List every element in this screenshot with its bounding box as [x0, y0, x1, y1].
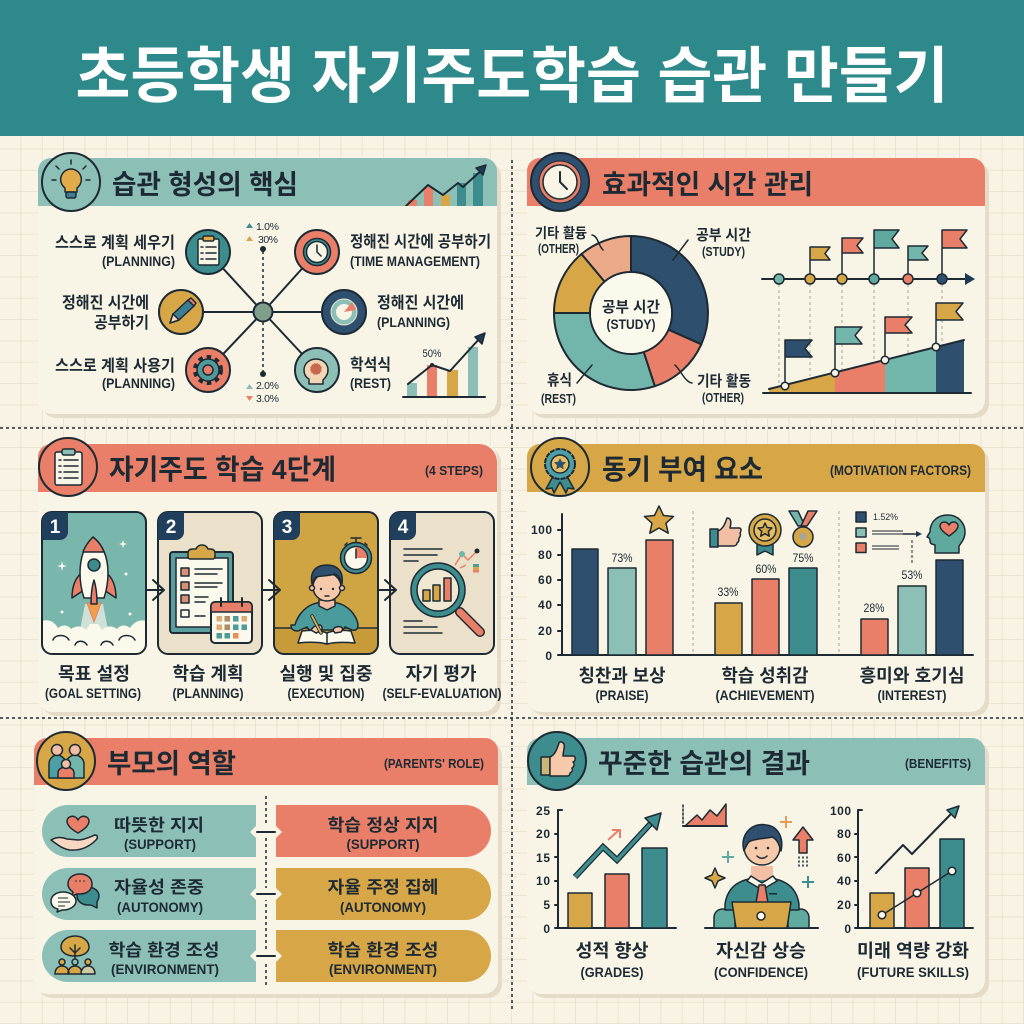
donut label: other bottom: (OTHER): [702, 391, 744, 405]
step 3 label: [280, 664, 372, 701]
bars: achievement: [715, 551, 817, 655]
label: interest: 흥미와 호기심: [860, 666, 964, 686]
row 2 left: autonomy: 자율성 존중: [114, 878, 204, 897]
chart: future skills: 100: [830, 804, 851, 818]
step 1 label: 목표 설정: [58, 664, 130, 684]
label: praise: (PRAISE): [596, 687, 648, 703]
icon: pencil node: [159, 290, 203, 334]
chart: grades: 0: [543, 922, 550, 936]
label: study: 정해진 시간에: [62, 294, 149, 312]
chart: grades: 5: [543, 898, 550, 912]
donut label: study: [696, 227, 751, 259]
label: planning 3: [55, 357, 175, 391]
donut label: other bottom: [697, 373, 751, 405]
icon: clock node: [295, 230, 339, 274]
chart: future skills: 0: [844, 922, 851, 936]
step 3 label: 실행 및 집중: [280, 664, 372, 684]
chart: future skills: 80: [837, 827, 851, 841]
bottom values: 2.0%: [256, 380, 279, 392]
chart: grades: 20: [536, 827, 550, 841]
icon: badge: [749, 514, 781, 555]
small growth chart: [403, 333, 485, 397]
chart: future skills: 60: [837, 851, 851, 865]
label: praise: 칭찬과 보상: [578, 666, 666, 686]
label: planning: 스스로 계획 세우기: [55, 234, 175, 252]
row 1 right: support: [276, 805, 491, 857]
step 4 label: 자기 평가: [406, 664, 477, 684]
label: rest: 학석식: [350, 356, 391, 374]
step 1 card: rocket: [42, 512, 146, 654]
bars: praise: [572, 506, 674, 655]
label: time management: [350, 233, 491, 269]
y axis: 80: [538, 548, 552, 562]
donut label: other top: [535, 225, 587, 256]
heading: 꾸준한 습관의 결과: [598, 749, 810, 779]
y axis: 0: [545, 649, 552, 663]
chart: future skills: [830, 804, 973, 936]
label: future skills: [857, 941, 969, 980]
flag timeline: [762, 230, 975, 386]
label: confidence: [714, 941, 808, 980]
bars: interest: 53%: [902, 568, 923, 582]
donut center label: 공부 시간: [602, 299, 660, 316]
panel: 꾸준한 습관의 결과: [527, 732, 989, 998]
label: achievement: 학습 성취감: [722, 666, 809, 686]
heading: 효과적인 시간 관리: [602, 170, 813, 200]
icon: family: [37, 732, 95, 790]
label: time management: 정해진 시간에 공부하기: [350, 233, 491, 251]
row 3 right: environment: [276, 930, 491, 982]
row 2 right: autonomy: 자율 주정 집헤: [328, 878, 438, 897]
illustration: confident student: [705, 816, 818, 928]
label: study: [62, 294, 149, 332]
label: rest: (REST): [350, 375, 391, 391]
row 1 right: support: 학습 정상 지지: [328, 816, 438, 835]
title banner: [0, 0, 1024, 136]
chart: grades: 10: [536, 874, 550, 888]
donut label: rest: 휴식: [547, 372, 572, 389]
row 1 left: support: (SUPPORT): [124, 836, 196, 852]
icon: timer node: [322, 290, 366, 334]
top values: 30%: [258, 234, 278, 246]
label: planning: [55, 234, 175, 269]
y axis: 40: [538, 598, 552, 612]
y axis: 20: [538, 624, 552, 638]
panel: 효과적인 시간 관리: [527, 153, 989, 418]
panel: 동기 부여 요소: [527, 438, 989, 716]
step 3 card: student and stopwatch: [274, 512, 378, 654]
y axis: [531, 514, 973, 663]
donut label: other bottom: 기타 활동: [697, 373, 751, 390]
step 2 card: clipboard and calendar: 2: [166, 517, 176, 538]
row 1 left: support: [42, 805, 256, 857]
step 2 label: [172, 664, 244, 701]
mini legend: 1.52%: [873, 512, 899, 523]
donut label: other top: (OTHER): [538, 242, 579, 256]
step 1 card: rocket: 1: [50, 517, 61, 538]
bars: interest: [861, 560, 963, 655]
icon: medal: [789, 511, 817, 547]
milestone area chart: [763, 303, 971, 393]
row 3 right: environment: 학습 환경 조성: [328, 941, 438, 960]
donut label: other top: 기타 활듕: [535, 225, 587, 241]
chart: future skills: 20: [837, 898, 851, 912]
label: planning 2: [377, 294, 464, 330]
step 3 card: student and stopwatch: 3: [282, 517, 292, 538]
label: interest: [860, 666, 964, 703]
row 2 right: autonomy: [276, 868, 491, 920]
top values: [246, 221, 279, 246]
english tag: (PARENTS' ROLE): [384, 756, 484, 771]
center connector: [250, 796, 282, 987]
header chart: [406, 165, 486, 206]
panel: 자기주도 학습 4단계: [38, 438, 502, 716]
row 3 right: environment: (ENVIRONMENT): [329, 961, 437, 977]
chart: future skills: 40: [837, 874, 851, 888]
step 1 label: (GOAL SETTING): [45, 685, 141, 701]
label: future skills: 미래 역량 강화: [857, 941, 969, 961]
bottom values: [246, 380, 279, 405]
icon: head node: [295, 348, 339, 392]
donut center label: [602, 299, 660, 332]
step 4 card: magnifier: [390, 512, 494, 654]
english tag: (MOTIVATION FACTORS): [830, 463, 971, 478]
step 4 card: magnifier: 4: [398, 517, 409, 538]
arrow: step 3 to 4: [379, 580, 396, 600]
icon: light bulb: [42, 153, 100, 211]
donut label: study: (STUDY): [702, 245, 745, 259]
mini legend: [856, 512, 922, 563]
mini area chart: [683, 804, 727, 826]
y axis: 60: [538, 573, 552, 587]
step 2 card: clipboard and calendar: [158, 512, 262, 654]
bars: achievement: 60%: [756, 562, 777, 576]
donut label: rest: [541, 372, 576, 406]
heading: 습관 형성의 핵심: [112, 170, 298, 200]
label: grades: [576, 941, 649, 980]
donut label: study: 공부 시간: [696, 227, 751, 244]
label: confidence: 자신감 상승: [716, 941, 806, 961]
chart: grades: [536, 804, 676, 936]
step 1 label: [45, 664, 141, 701]
heading: 자기주도 학습 4단계: [109, 454, 336, 485]
icon: rosette: [531, 438, 589, 496]
top values: 1.0%: [256, 221, 279, 233]
row 2 right: autonomy: (AUTONOMY): [340, 899, 426, 915]
row 1 right: support: (SUPPORT): [346, 836, 420, 852]
chart: grades: 15: [536, 851, 550, 865]
row 3 left: environment: (ENVIRONMENT): [111, 961, 219, 977]
bottom values: 3.0%: [256, 393, 279, 405]
icon: thumbs up: [528, 732, 586, 790]
label: rest: [350, 356, 391, 391]
bars: achievement: 33%: [718, 585, 739, 599]
step 4 label: [382, 664, 502, 701]
arrow: step 1 to 2: [147, 580, 164, 600]
step 4 label: (SELF-EVALUATION): [382, 685, 502, 701]
label: achievement: (ACHIEVEMENT): [716, 687, 814, 703]
y axis: 100: [531, 523, 552, 537]
label: grades: 성적 향상: [576, 941, 649, 961]
bars: interest: 28%: [864, 601, 885, 615]
label: praise: [578, 666, 666, 703]
icon: head with heart: [927, 515, 965, 553]
chart: grades: 25: [536, 804, 550, 818]
small growth chart: 50%: [422, 348, 442, 360]
label: study: 공부하기: [94, 314, 149, 332]
heading: 부모의 역할: [107, 749, 236, 779]
label: planning 2: (PLANNING): [377, 314, 450, 330]
step 2 label: 학습 계획: [172, 664, 244, 684]
panel: 습관 형성의 핵심: [38, 153, 501, 418]
arrow: step 2 to 3: [263, 580, 280, 600]
heading: 동기 부여 요소: [602, 454, 763, 485]
donut center label: (STUDY): [606, 317, 656, 332]
step 3 label: (EXECUTION): [288, 685, 364, 701]
label: planning: (PLANNING): [102, 253, 175, 269]
icon: thumbs up: [710, 518, 741, 547]
panel: 부모의 역할: [34, 732, 502, 998]
row 3 left: environment: 학습 환경 조성: [108, 941, 220, 960]
label: achievement: [716, 666, 814, 703]
label: planning 3: 스스로 계획 사용기: [55, 357, 175, 375]
row 2 left: autonomy: [42, 868, 256, 920]
icon: checklist clipboard: [39, 438, 97, 496]
row 3 left: environment: [42, 930, 256, 982]
label: confidence: (CONFIDENCE): [714, 964, 808, 980]
label: planning 3: (PLANNING): [102, 375, 175, 391]
bars: achievement: 75%: [792, 551, 814, 565]
english tag: (4 STEPS): [425, 463, 483, 478]
donut chart: [554, 235, 708, 390]
title banner: 초등학생 자기주도학습 습관 만들기: [76, 42, 948, 110]
row 1 left: support: 따뜻한 지지: [114, 816, 204, 835]
donut label: rest: (REST): [541, 392, 576, 406]
icon: gear node: [186, 348, 230, 392]
label: interest: (INTEREST): [878, 687, 946, 703]
label: planning 2: 정해진 시간에: [377, 294, 464, 312]
english tag: (BENEFITS): [905, 756, 971, 771]
label: time management: (TIME MANAGEMENT): [350, 253, 480, 269]
label: future skills: (FUTURE SKILLS): [857, 964, 969, 980]
row 2 left: autonomy: (AUTONOMY): [117, 899, 203, 915]
icon: clock: [531, 153, 589, 211]
label: grades: (GRADES): [580, 964, 644, 980]
bars: praise: 73%: [612, 551, 633, 565]
hub and spokes: [181, 246, 344, 377]
icon: clipboard node: [186, 230, 230, 274]
step 2 label: (PLANNING): [172, 685, 244, 701]
